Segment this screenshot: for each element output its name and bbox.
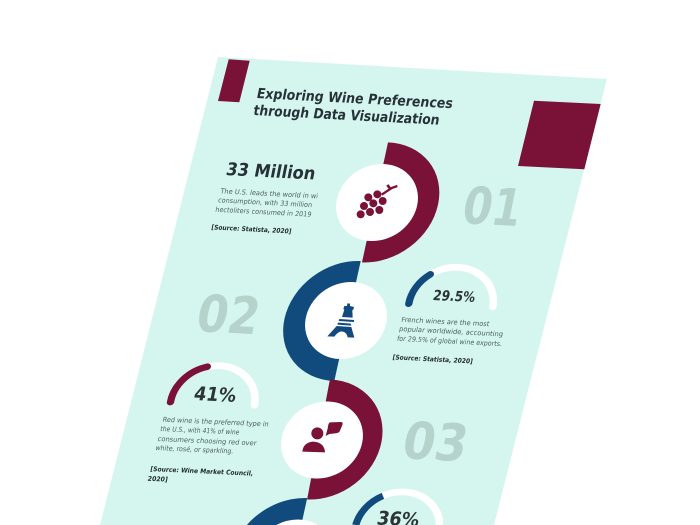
section 1 text: 33 million: 33 Million (224, 160, 317, 184)
section 3 text: red wine: 2020] (147, 475, 168, 484)
section 1 text: 33 million (211, 162, 318, 234)
infographic canvas (100, 57, 607, 525)
donut 4: blue half ring with white circle, cropped by the frame (247, 496, 319, 525)
section 3 text: red wine: 41% (192, 382, 239, 407)
section 3 text: red wine (147, 382, 269, 484)
section 2 text: french wines: [Source: Statista, 2020] (392, 353, 473, 365)
gauge: 29.5 percent (409, 266, 500, 307)
gauge: 41 percent (170, 364, 261, 405)
title (252, 86, 454, 129)
section 1 text: 33 million: [Source: Statista, 2020] (211, 223, 292, 235)
section 2 text: french wines: popular worldwide, accounting (398, 325, 504, 338)
gauge: 36 percent, cropped by the frame (356, 490, 445, 525)
donut 2: blue half ring with white circle (271, 259, 393, 381)
section 3 text: red wine: the U.S., with 41% of wine (160, 425, 240, 437)
section 3 text: red wine: [Source: Wine Market Council, (150, 465, 254, 478)
decorative wine square top right (518, 101, 601, 169)
section 1 text: 33 million: hectoliters consumed in 2019 (215, 206, 312, 219)
section 2 text: french wines: French wines are the most (401, 316, 490, 328)
number 02: 02 (191, 284, 265, 347)
decorative wine rectangle top left (218, 59, 250, 102)
section 3 text: red wine: white, rosé, or sparkling. (155, 444, 234, 455)
title: Exploring Wine Preferences (255, 86, 454, 112)
icon: person with speech bubble (302, 422, 343, 452)
section 1 text: 33 million: consumption, with 33 million (217, 196, 313, 209)
section 2 text: french wines: for 29.5% of global wine exports. (396, 335, 503, 348)
number 01: 01 (457, 176, 527, 239)
section 2 text: french wines (392, 288, 504, 365)
donut 3: wine half ring with white circle (275, 380, 393, 502)
section 2 text: french wines: 29.5% (432, 288, 477, 306)
panel: mint tilted poster background (100, 57, 607, 525)
section 1 text: 33 million: The U.S. leads the world in wine (219, 187, 327, 201)
donut 1: wine half ring with white circle (330, 142, 451, 265)
number 03: 03 (397, 411, 473, 474)
icon: grapes (357, 185, 397, 218)
section 3 text: red wine: consumers choosing red over (157, 435, 257, 447)
title: through Data Visualization (252, 103, 441, 129)
icon: eiffel tower (327, 303, 354, 338)
section 3 text: red wine: Red wine is the preferred type in (162, 416, 269, 428)
